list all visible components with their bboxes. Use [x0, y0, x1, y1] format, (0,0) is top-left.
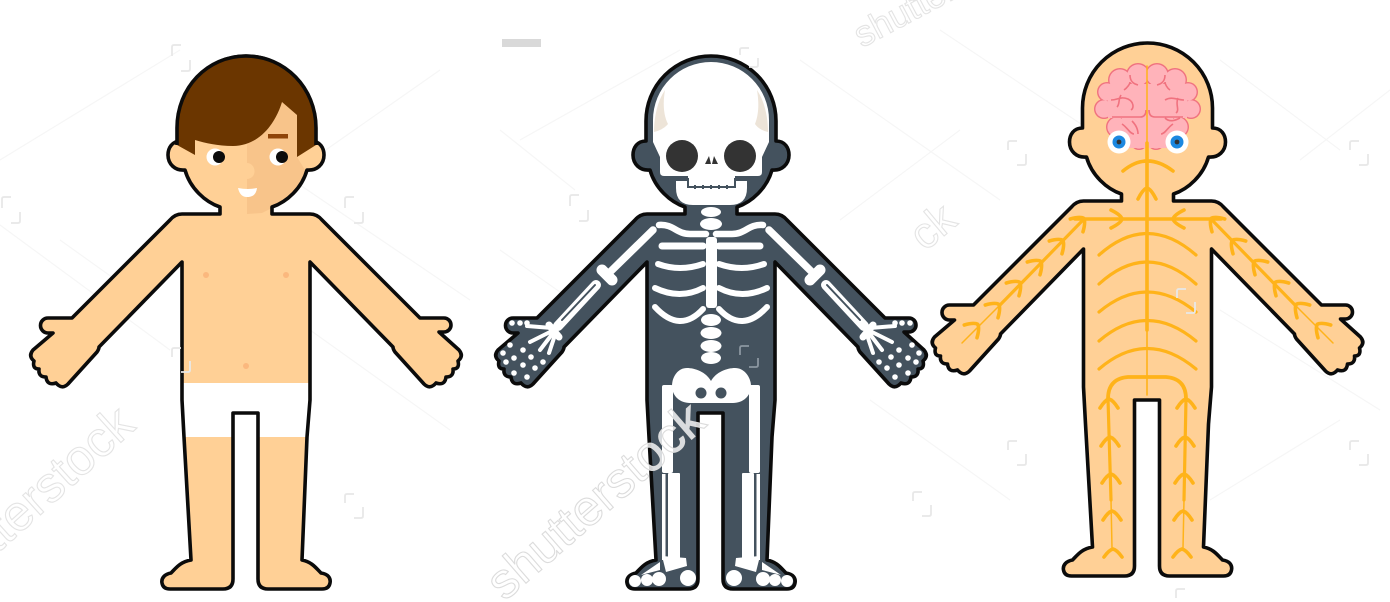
skull side shading: [654, 90, 768, 132]
right leg bones: [726, 385, 793, 587]
arm nerves: [962, 219, 1333, 343]
spine: [700, 207, 722, 364]
figure: skeleton: [496, 56, 926, 589]
boy skin silhouette: [31, 56, 461, 589]
nervous figure silhouette: [932, 43, 1363, 576]
right hand dots: [876, 320, 922, 380]
nerves: [962, 66, 1333, 548]
hair outline: [177, 56, 316, 145]
jaw and teeth: [676, 175, 747, 205]
figure: nervous system: [932, 43, 1363, 576]
left arm bones: [527, 230, 653, 353]
watermark: grey tab: [502, 39, 541, 47]
nipples and navel: [203, 272, 289, 369]
brain fill layer: [1095, 64, 1200, 149]
smile: [238, 188, 257, 197]
leg nerves: [1108, 399, 1186, 548]
brain: [1094, 63, 1201, 150]
nerve eyes: [1108, 130, 1188, 154]
pelvis: [672, 368, 751, 403]
boy outline: [31, 56, 461, 589]
face shading: [247, 102, 305, 214]
watermark: stock text: ck: [900, 193, 966, 260]
right clavicle and ribs: [716, 225, 767, 321]
skull: [653, 62, 769, 176]
clavicle and ribs: [655, 225, 706, 321]
underpants: [183, 383, 309, 437]
left hand dots: [500, 320, 546, 380]
eyebrow: [268, 134, 288, 138]
right half bones: [716, 225, 922, 587]
boy left eye: [206, 148, 225, 166]
right arm bones: [769, 230, 895, 353]
leg arch: [1108, 377, 1186, 399]
rib nerves: [1099, 234, 1196, 369]
eye sockets: [666, 140, 756, 172]
left leg bones: [629, 385, 696, 587]
figure: boy body: [31, 56, 461, 589]
hair: [177, 56, 316, 157]
spinal cord: [1146, 66, 1148, 395]
left half bones: [500, 225, 706, 587]
nerve chevrons: [964, 188, 1331, 557]
watermark: stock text: [0, 0, 1038, 602]
frown: [1123, 161, 1173, 171]
brain folds: [1111, 75, 1184, 134]
brain outline layer: [1094, 63, 1201, 150]
shoulder nerves: [1075, 217, 1221, 221]
nose: [705, 156, 718, 164]
sternum: [706, 237, 717, 308]
boy right eye: [270, 148, 288, 166]
skeleton dark silhouette: [496, 56, 926, 589]
